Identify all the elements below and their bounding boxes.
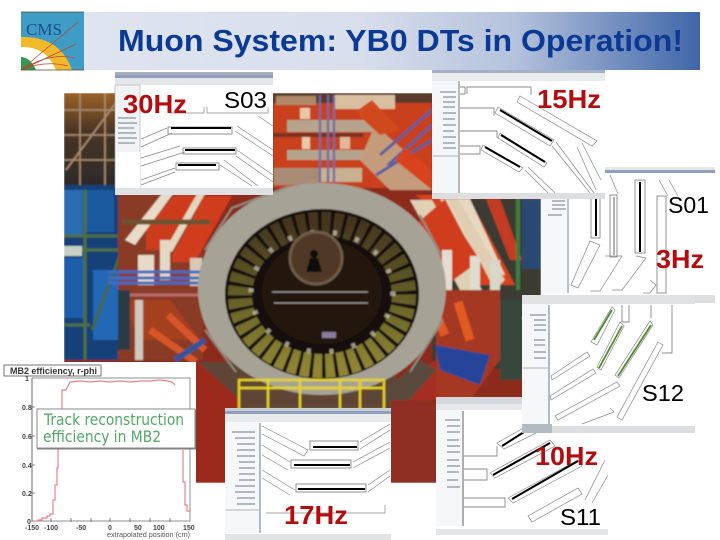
title banner (84, 12, 700, 70)
screen: S03 30Hz (115, 72, 273, 195)
x axis labels: 0 (108, 525, 112, 532)
blue racks at left (64, 185, 150, 360)
x axis labels: -150 (25, 525, 39, 532)
label: S11: S11 (560, 504, 601, 530)
label: 17Hz: 17Hz (284, 500, 348, 530)
screen: S11 10Hz (436, 397, 608, 535)
y axis labels: 0.8 (22, 405, 32, 412)
chamber white squares (251, 232, 393, 352)
chart title: MB2 efficiency, r-phi (10, 366, 97, 376)
callout: track reconstruction: Track reconstruction (43, 410, 184, 429)
x axis labels: -100 (44, 525, 58, 532)
x axis labels: 100 (153, 525, 165, 532)
detector ring (198, 183, 446, 395)
left scaffolding (64, 93, 124, 188)
yellow platform (239, 380, 384, 410)
chart: MB2 efficiency (3, 362, 196, 540)
y axis labels: 0.2 (22, 491, 32, 498)
x axis labels: -50 (76, 525, 86, 532)
label: 3Hz: 3Hz (656, 244, 704, 274)
title: Muon System: YB0 DTs in Operation! (118, 23, 683, 58)
label: 15Hz: 15Hz (537, 84, 601, 114)
screen: 15Hz (432, 70, 605, 199)
x axis title: extrapolated position (cm) (107, 530, 190, 539)
detector bore (225, 209, 419, 379)
y axis labels (22, 376, 32, 526)
screen: 17Hz (225, 408, 391, 540)
screen: S01 3Hz (541, 167, 715, 303)
label: S01: S01 (668, 192, 709, 218)
right lower blue and red (430, 290, 500, 400)
icon: CMS logo: CMS (26, 20, 62, 39)
label: 10Hz: 10Hz (535, 441, 598, 471)
left red section (118, 190, 203, 360)
x axis labels (25, 525, 195, 532)
x axis labels: 150 (183, 525, 195, 532)
inner barrel (262, 240, 382, 344)
callout: track reconstruction: efficiency in MB2 (43, 427, 161, 446)
bottom area (196, 362, 396, 483)
y axis labels: 0.4 (22, 463, 32, 470)
efficiency curve (34, 380, 190, 521)
label: 30Hz: 30Hz (123, 89, 187, 119)
label: S12: S12 (642, 380, 684, 406)
top red structure (273, 93, 432, 188)
callout: track reconstruction (37, 409, 196, 449)
label: S03: S03 (224, 87, 267, 113)
muon chamber segments (240, 224, 404, 366)
y axis labels: 0.6 (22, 434, 32, 441)
central disc (290, 232, 342, 284)
icon: CMS logo (21, 12, 84, 70)
detector photo (64, 93, 541, 483)
x axis labels: 50 (134, 525, 142, 532)
screen: S12 (522, 295, 695, 433)
right red spokes (432, 199, 541, 369)
y axis labels: 1 (25, 376, 29, 383)
y axis labels: 0 (27, 519, 31, 526)
